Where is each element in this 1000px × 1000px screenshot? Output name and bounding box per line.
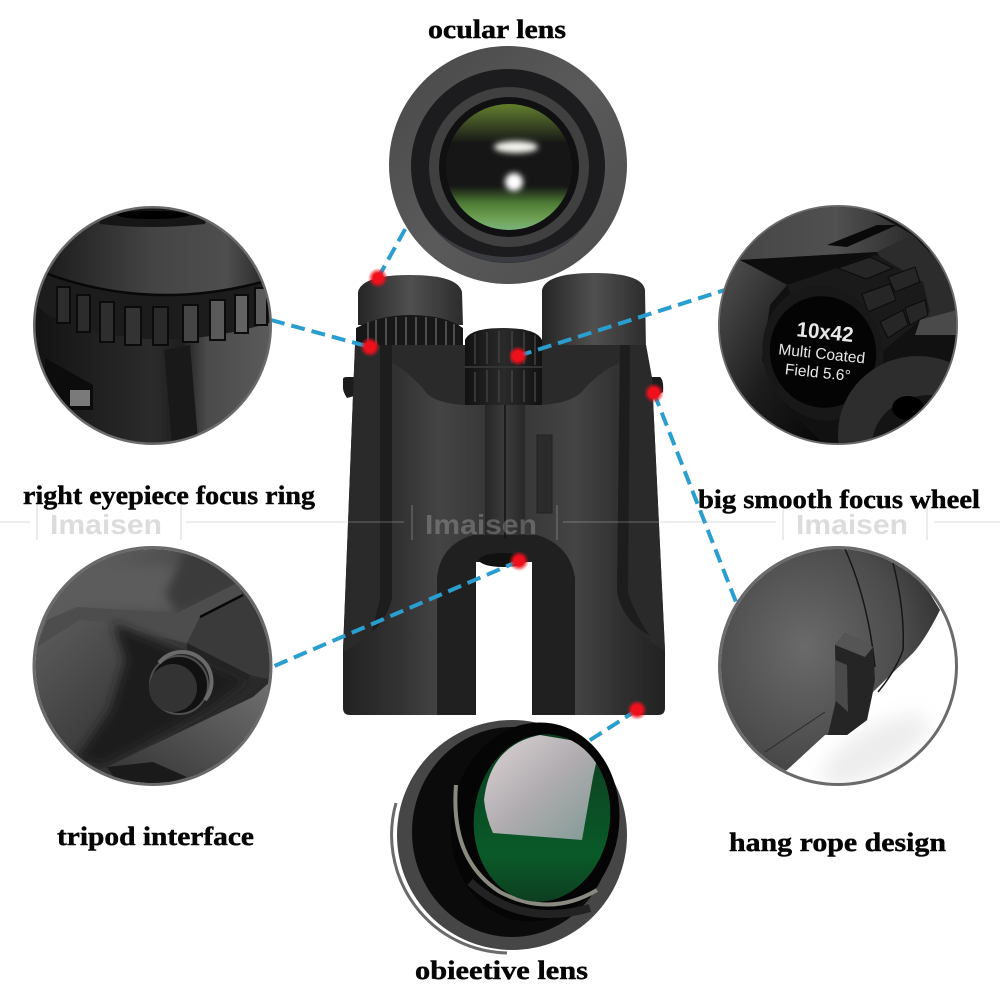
heading: ocular lens: ocular lens	[428, 14, 566, 44]
tripod screw	[150, 656, 208, 714]
ridge	[37, 583, 243, 647]
objective glass	[474, 734, 610, 902]
ring notches	[57, 287, 267, 345]
right outer grip	[617, 345, 665, 652]
strap lug	[828, 633, 875, 735]
tripod socket	[479, 553, 527, 567]
ring band	[37, 274, 270, 339]
socket recess	[75, 623, 247, 767]
outer frame arc	[392, 803, 507, 953]
watermark band	[0, 500, 1000, 540]
centre focus wheel	[465, 328, 542, 405]
panel: ocular lens	[389, 46, 627, 284]
red markers	[360, 268, 664, 720]
centre hinge	[485, 405, 525, 535]
left strap lug	[343, 377, 358, 398]
panel: objective lens	[392, 709, 635, 953]
side panel	[537, 435, 552, 513]
heading: objective lens: obieetive lens	[415, 955, 588, 985]
right shoulder shade	[541, 345, 620, 405]
left lump	[715, 260, 825, 445]
wheel markings: 10x42	[795, 318, 855, 347]
barrel	[788, 256, 930, 350]
side lug	[45, 358, 93, 410]
right eyecup	[542, 273, 646, 350]
connector lines	[271, 224, 738, 744]
wheel cap	[762, 310, 868, 354]
left shoulder shade	[392, 345, 465, 405]
watermark band: Imaisen	[50, 509, 162, 540]
watermark band: Imaisen	[425, 509, 537, 540]
binoculars	[343, 273, 665, 715]
heading: right eyepiece focus ring: right eyepiece focus ring	[23, 480, 315, 510]
right strap lug	[648, 377, 663, 399]
ocular glass	[449, 104, 569, 230]
panel: hang rope design	[715, 545, 956, 800]
plate	[218, 623, 270, 680]
left eyecup	[358, 275, 463, 325]
body	[343, 345, 665, 715]
panel: right eyepiece focus ring	[30, 205, 275, 450]
lower strip	[107, 680, 272, 782]
left focus ring	[356, 315, 463, 350]
panel: tripod interface	[30, 545, 275, 790]
eyecup	[838, 356, 950, 443]
wheel markings	[779, 322, 865, 380]
left outer grip	[343, 345, 392, 652]
watermark band: Imaisen	[796, 509, 908, 540]
panel: big smooth focus wheel	[718, 205, 958, 445]
wheel markings: Field 5.6°	[784, 361, 851, 385]
lower arch	[437, 535, 575, 715]
heading: hang rope design: hang rope design	[729, 827, 946, 857]
wheel markings: Multi Coated	[778, 341, 866, 367]
heading: tripod interface: tripod interface	[57, 821, 254, 851]
heading: big smooth focus wheel: big smooth focus wheel	[698, 484, 980, 514]
